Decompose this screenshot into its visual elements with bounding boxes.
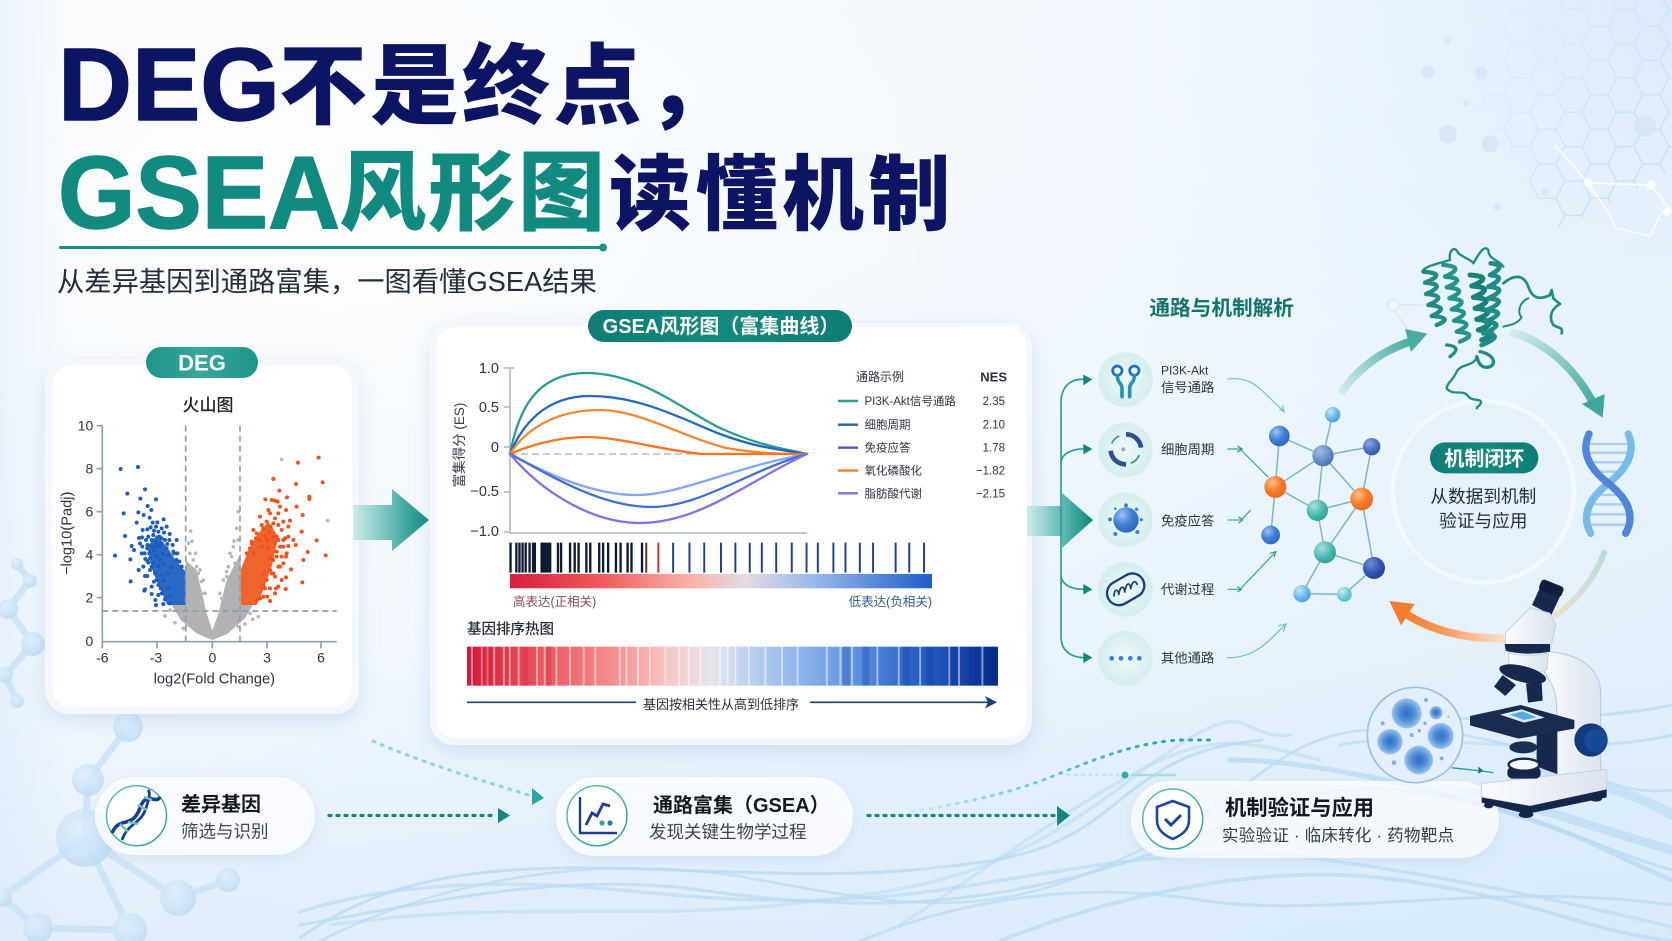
pathways heading: 通路与机制解析 [1149,297,1294,320]
icon: mitochondrion [1103,569,1149,610]
step 2 text: 发现关键生物学过程 [649,822,806,842]
decoration: left molecule [0,558,240,941]
legend [838,369,1007,500]
cycle arrow to protein [1341,329,1427,393]
legend: 氧化磷酸化 [864,464,922,478]
volcano axis labels: 0 [208,649,216,665]
pathway: PI3K-Akt: PI3K-Akt [1161,364,1209,378]
pathway: metabolism: 代谢过程 [1161,582,1214,597]
volcano axis labels: 3 [263,649,271,665]
pathway: immune response: 免疫应答 [1161,512,1214,528]
step 3 text: 机制验证与应用 [1225,795,1374,820]
rank colour bar [510,574,932,588]
pathway: other: 其他通路 [1161,651,1214,666]
pathway: cell cycle: 细胞周期 [1161,442,1214,457]
up-regulated points [241,458,326,605]
legend: 免疫应答 [864,441,911,455]
grey points [165,459,328,640]
volcano axis labels: 6 [86,504,94,520]
cycle arrow to DNA [1510,332,1605,418]
rank bar labels [513,594,932,609]
icon: chart [567,786,627,846]
icon: shield [1143,789,1203,849]
ranking heatmap [467,647,998,686]
gene rug plot [511,543,924,573]
icon: DNA helix [1586,434,1631,533]
decoration: faint node [1388,299,1423,330]
pathway: PI3K-Akt [1098,352,1214,407]
centre circle [1393,401,1574,582]
title: 读懂机制 [609,150,955,241]
enrichment curves chart [451,361,807,540]
legend: −1.82 [976,466,1005,478]
GSEA pill heading: GSEA风形图（富集曲线） [603,314,839,338]
gene network [1261,407,1385,602]
dotted arrow 1 upper [373,741,544,805]
volcano axis labels: 6 [317,649,325,665]
volcano axis labels: log2(Fold Change) [154,671,275,687]
rank bar labels: 高表达(正相关) [513,594,596,609]
arrow: DEG to GSEA [353,489,429,551]
connector arrows [1227,379,1286,658]
pathway: cell cycle [1098,423,1214,477]
volcano axis labels: -6 [96,649,109,665]
legend: PI3K-Akt信号通路 [864,394,956,408]
legend: 细胞周期 [864,418,910,432]
volcano axis labels: −log10(Padj) [60,492,76,575]
volcano plot heading: 火山图 [182,396,234,415]
curves [510,373,807,523]
pathway: immune response [1098,493,1214,547]
legend: NES [980,370,1007,384]
pathway: other [1098,631,1214,686]
title: GSEA [58,135,340,250]
cell micrograph [1367,687,1493,783]
legend: 脂肪酸代谢 [864,486,922,500]
ranking direction arrow [467,696,997,712]
pathway: metabolism [1098,562,1214,617]
cell micrograph and microscope [1367,579,1608,818]
step 1 text: 差异基因 [181,793,261,816]
ES axis title: 富集得分 (ES) [451,403,467,487]
step 3 text: 实验验证 · 临床转化 · 药物靶点 [1222,826,1454,845]
ES axis labels: −0.5 [470,484,499,500]
volcano axis labels: -3 [150,649,162,665]
dotted arrow 2 upper [912,740,1215,812]
flow: dotted connectors [329,740,1215,826]
legend: 2.35 [983,396,1005,408]
panel: GSEA enrichment plot [430,310,1032,745]
title [58,27,955,250]
rank bar labels: 低表达(负相关) [849,595,932,609]
step 1: DEG [95,777,315,855]
icon: antibody [1113,366,1139,397]
subtitle: 从差异基因到通路富集，一图看懂GSEA结果 [57,266,597,297]
DEG pill heading [146,347,258,378]
volcano axis labels: 10 [78,418,94,434]
branching arrows [1061,375,1092,663]
decoration: bottom waves [300,705,1672,941]
volcano axis labels: 2 [86,590,94,606]
step 1 text [181,793,268,842]
threshold lines [102,426,337,642]
cycle arrow to network [1389,601,1507,639]
ES axis labels: 0.5 [479,400,499,416]
head [1505,608,1556,652]
step 3: validation [1131,781,1499,858]
arrow: GSEA to pathways [1027,493,1093,548]
GSEA pill heading [588,310,852,342]
DEG pill heading: DEG [178,350,226,376]
focus knob [1574,723,1608,757]
pathway: PI3K-Akt: 信号通路 [1161,380,1214,395]
volcano axis labels: 8 [86,461,94,477]
ranking direction arrow: 基因按相关性从高到低排序 [643,697,799,712]
ES axis labels: 0 [491,440,499,456]
legend: 1.78 [983,443,1005,455]
volcano axis labels: 4 [86,547,94,563]
title underline [59,244,607,252]
heatmap heading: 基因排序热图 [467,620,554,638]
pill: 机制闭环 [1430,442,1538,473]
title: 不是终点 [279,37,645,136]
title: ， [646,37,734,136]
panel: pathways and network [1061,297,1385,686]
volcano chart [60,418,337,687]
ES axis labels [470,361,499,540]
eyepiece [1532,579,1565,615]
base [1482,769,1607,806]
legend: −2.15 [976,488,1005,500]
cycle arrow to microscope [1553,551,1605,617]
mechanism cycle [1341,248,1631,639]
step 3 text [1222,795,1454,845]
decoration: top right hexagons [1422,0,1672,236]
icon: DNA [106,786,166,846]
nosepiece and objectives [1494,660,1548,703]
centre text: 验证与应用 [1439,511,1527,531]
ES axis labels: 1.0 [479,361,499,377]
stage [1470,705,1574,739]
volcano axis labels: 0 [86,633,94,649]
microscope [1470,579,1608,818]
legend: 通路示例 [856,369,904,384]
step 2: GSEA [556,777,853,856]
panel: DEG volcano plot [45,347,359,714]
condenser [1507,730,1557,779]
connector to mechanism pill [1068,772,1175,778]
step 2 text: 通路富集（GSEA） [653,793,830,817]
legend: 2.10 [983,420,1005,432]
ES axis labels: −1.0 [470,524,499,540]
volcano axis labels [60,418,325,687]
icon: protein structure [1423,248,1562,408]
pill: 机制闭环: 机制闭环 [1444,447,1524,470]
centre text: 从数据到机制 [1430,486,1536,506]
dotted arrow 1 [329,808,510,823]
dotted arrow 2 [868,806,1070,826]
title: DEG [58,27,280,142]
step 2 text [649,793,830,842]
arm [1543,652,1601,777]
icon: immune cell [1108,503,1143,536]
step 1 text: 筛选与识别 [181,822,268,842]
icon: dots [1109,656,1142,661]
icon: cell cycle [1111,434,1141,464]
title: 风形图 [339,145,608,242]
down-regulated points [115,467,186,605]
